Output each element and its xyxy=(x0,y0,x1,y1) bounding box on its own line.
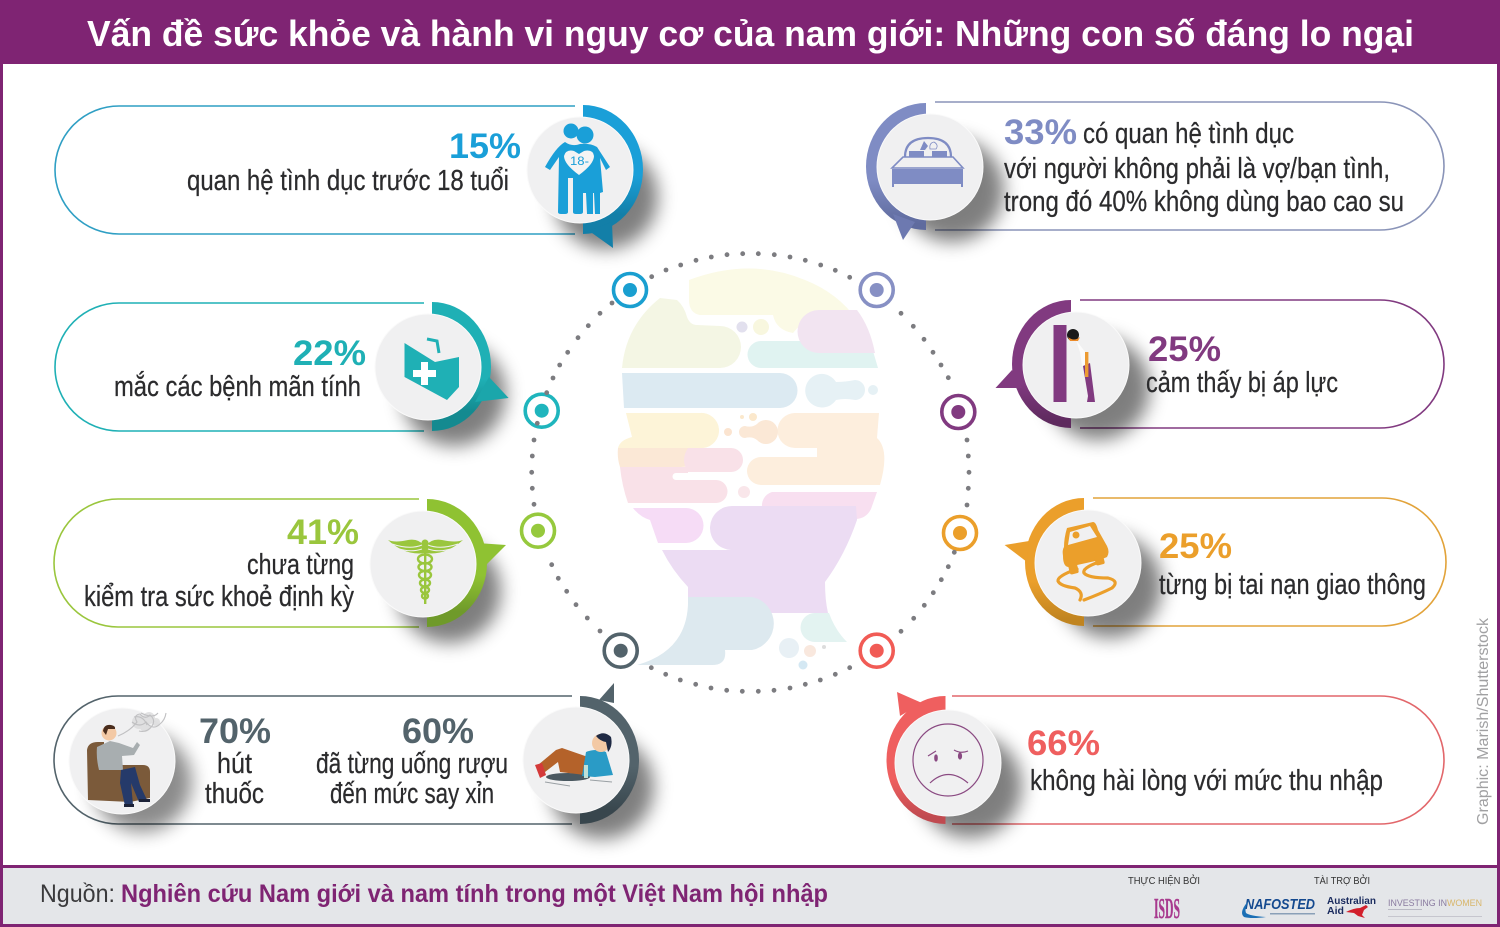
label drinking: đã từng uống rượu xyxy=(316,748,508,780)
panel: 15% early sex xyxy=(55,105,658,249)
logo: Australian Aid: Aid xyxy=(1327,905,1344,917)
credit: sponsors xyxy=(1242,874,1482,918)
stat 60%: 60% xyxy=(402,712,474,751)
panel: 25% pressure xyxy=(996,300,1444,440)
bullseye nodes xyxy=(522,274,976,667)
logo: Australian Aid xyxy=(1327,895,1376,918)
icon: medical kit xyxy=(404,339,459,400)
source line: Nghiên cứu Nam giới và nam tính trong một Việt Nam hội nhập xyxy=(121,880,828,908)
label drinking xyxy=(316,748,508,810)
label: mắc các bệnh mãn tính xyxy=(114,370,361,403)
icon: stressed man at wall xyxy=(1054,325,1095,402)
stat 41%: 41% xyxy=(287,513,359,552)
label: chưa từng xyxy=(247,549,354,581)
icon: sad face xyxy=(913,724,983,796)
stat 70%: 70% xyxy=(199,712,271,751)
logo: Investing in Women: INVESTING IN xyxy=(1388,898,1447,909)
credit: produced by: THỰC HIỆN BỞI xyxy=(1128,874,1200,887)
logo: Investing in Women: WOMEN xyxy=(1447,898,1482,909)
credit: sponsors: TÀI TRỢ BỞI xyxy=(1314,874,1370,887)
credit: produced by: ISDS xyxy=(1154,893,1180,925)
label smoking: thuốc xyxy=(205,778,264,810)
icon: skidding car xyxy=(1058,522,1115,600)
icon: couple: 18- xyxy=(570,154,589,168)
stat 22%: 22% xyxy=(293,334,366,373)
node purple xyxy=(942,396,975,428)
logo: Investing in Women xyxy=(1388,898,1482,917)
label xyxy=(84,549,354,613)
label drinking: đến mức say xỉn xyxy=(330,778,494,810)
credit: produced by xyxy=(1128,874,1200,925)
icon: couple xyxy=(545,124,610,214)
panel: 66% income dissatisfaction xyxy=(886,692,1444,838)
logo: NAFOSTED xyxy=(1242,896,1315,918)
label smoking: hút xyxy=(217,748,252,780)
stat 25% pressure: 25% xyxy=(1148,330,1221,369)
label smoking xyxy=(205,748,264,810)
icon: drunk man xyxy=(535,733,613,786)
stat 25% accident: 25% xyxy=(1159,527,1232,566)
node teal xyxy=(525,394,558,427)
node green xyxy=(522,514,554,547)
icon: smoking man xyxy=(87,712,166,807)
node blue xyxy=(614,274,646,306)
stat 15%: 15% xyxy=(449,127,521,166)
logo: NAFOSTED: NAFOSTED xyxy=(1245,896,1315,913)
panel: 70% smoking and 60% drinking xyxy=(54,683,654,839)
panel: 41% no checkup xyxy=(54,499,506,643)
header bar xyxy=(0,0,1500,64)
source line: Nguồn: xyxy=(40,880,115,908)
label: cảm thấy bị áp lực xyxy=(1146,367,1338,399)
node slate xyxy=(604,634,637,667)
node red xyxy=(860,634,893,667)
icon: caduceus xyxy=(388,540,463,604)
dotted circle xyxy=(529,251,971,694)
panel: 33% unfaithful sex xyxy=(866,102,1444,242)
icon: bed xyxy=(892,138,963,187)
footer band xyxy=(0,865,1500,927)
label: kiểm tra sức khoẻ định kỳ xyxy=(84,581,354,613)
node periwinkle xyxy=(860,274,893,306)
panel: 25% traffic accident xyxy=(1005,498,1446,638)
stat 66%: 66% xyxy=(1027,724,1100,763)
label: có quan hệ tình dục xyxy=(1083,118,1294,150)
node orange xyxy=(944,516,976,550)
logo: Australian Aid: Australian xyxy=(1327,895,1376,907)
label xyxy=(1004,118,1404,218)
label: với người không phải là vợ/bạn tình, xyxy=(1004,153,1390,185)
stat 33%: 33% xyxy=(1004,113,1077,152)
panel: 22% chronic disease xyxy=(55,302,509,446)
label: trong đó 40% không dùng bao cao su xyxy=(1004,186,1404,218)
label: từng bị tai nạn giao thông xyxy=(1159,569,1426,601)
graphic credit: Graphic: Marish/Shutterstock xyxy=(1475,617,1492,825)
title: Vấn đề sức khỏe và hành vi nguy cơ của nam giới: Những con số đáng lo ngại xyxy=(87,13,1414,54)
label: quan hệ tình dục trước 18 tuổi xyxy=(187,165,509,197)
label: không hài lòng với mức thu nhập xyxy=(1030,765,1383,797)
central head illustration xyxy=(618,268,884,670)
